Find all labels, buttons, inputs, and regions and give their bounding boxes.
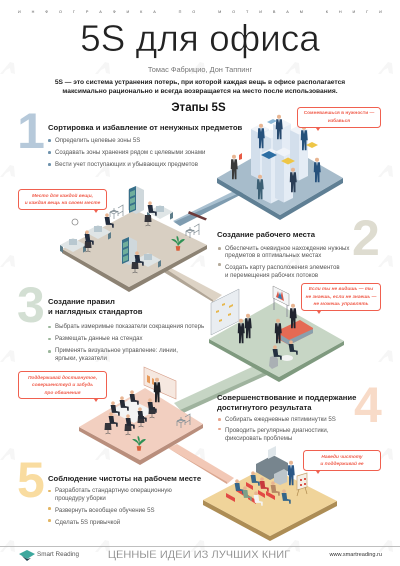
callout 5: и поддерживай ее (320, 462, 364, 467)
connector 4 to 5 (168, 444, 234, 484)
step 4 bullets: Проводить регулярные диагностики, (225, 427, 329, 434)
step 2 bullets: и перемещения рабочих потоков (225, 272, 318, 279)
intro text: максимально рационально и всегда возвращается на место после использования. (62, 88, 338, 95)
step 1 bullets: Вести учет поступающих и убывающих предметов (55, 160, 198, 168)
step 3 number: 3 (17, 277, 45, 333)
archive blocks (251, 120, 308, 204)
step 3 bullets: Выбрать измеримые показатели сокращения потерь (55, 323, 204, 330)
top strapline: А (99, 10, 102, 14)
callout 4 (18, 371, 107, 399)
top strapline: В (273, 10, 275, 14)
step 4 heading: достигнутого результата (217, 403, 312, 412)
step 3 bullets (48, 323, 204, 362)
authors: Томас Фабрицио, Дон Таппинг (148, 65, 252, 74)
connector 1 to 2 (173, 190, 246, 226)
footer rule (0, 546, 400, 548)
step 2 bullets: Обеспечить очевидное нахождение нужных (225, 244, 349, 252)
step 5 heading: Соблюдение чистоты на рабочем месте (48, 474, 201, 483)
platform 3: visual standards (209, 286, 344, 382)
step 5 bullets: Развернуть всеобщее обучение 5S (55, 507, 155, 514)
step 2 bullets: предметов в оптимальных местах (225, 252, 321, 259)
top strapline: П (179, 10, 181, 14)
top strapline: К (326, 10, 328, 14)
top strapline: М (300, 10, 303, 14)
callout 3 (301, 283, 381, 311)
callout 2: и каждая вещь на своем месте (25, 201, 100, 206)
connector 3 to 4 (174, 366, 268, 414)
step 5 number: 5 (17, 452, 45, 508)
top strapline: Г (366, 10, 368, 14)
step 1 bullets: Определить целевые зоны 5S (55, 136, 140, 144)
callout 2 (18, 189, 107, 210)
top strapline: Р (86, 10, 88, 14)
top strapline: К (140, 10, 142, 14)
callout 4: Поддерживай достигнутое, (28, 376, 97, 380)
step 2 number: 2 (352, 210, 380, 266)
step 4 bullets (218, 416, 336, 442)
top strapline: О (59, 10, 62, 14)
footer logo icon (19, 550, 35, 561)
step 1 bullets: Создавать зоны хранения рядом с целевыми зонами (55, 148, 205, 156)
footer slogan: ЦЕННЫЕ ИДЕИ ИЗ ЛУЧШИХ КНИГ (108, 549, 290, 561)
top strapline: Г (73, 10, 75, 14)
section heading: Этапы 5S (171, 102, 226, 114)
callout 4: про обвинения (44, 391, 81, 396)
step 4 number: 4 (354, 377, 382, 433)
top strapline: И (379, 10, 382, 14)
step 5 bullets: Разработать стандартную операционную (55, 487, 172, 494)
top strapline: Н (32, 10, 34, 14)
step 3 heading: Создание правил (48, 297, 115, 306)
step 1 number: 1 (17, 103, 45, 159)
intro text (55, 79, 345, 95)
top strapline: Н (339, 10, 342, 14)
top strapline: Т (246, 10, 248, 14)
top strapline: Ф (45, 10, 48, 14)
callout 2: Место для каждой вещи, (32, 194, 93, 198)
callout 1 (297, 107, 381, 128)
footer brand: Smart Reading (37, 551, 79, 558)
top strapline: И (127, 10, 129, 14)
step 4 heading: Совершенствование и поддержание (217, 393, 356, 402)
step 4 bullets: Собирать ежедневные пятиминутки 5S (225, 416, 336, 422)
callout 1: Сомневаешься в нужности — избавься (304, 111, 374, 124)
title: 5S для офиса (80, 18, 320, 59)
top strapline (18, 10, 382, 14)
step 2 bullets (218, 244, 350, 279)
step 5 bullets (48, 487, 172, 526)
platform 4: improvement (79, 367, 203, 465)
top strapline: И (18, 10, 21, 14)
top strapline: М (218, 10, 221, 14)
step 3 bullets: ярлыки, указатели (55, 355, 107, 362)
platform 1: sorting (217, 115, 343, 220)
top strapline: О (232, 10, 235, 14)
step 1 bullets (48, 136, 205, 168)
callout 5 (303, 450, 381, 471)
intro text: 5S — это система устранения потерь, при которой каждая вещь в офисе располагается (55, 79, 345, 86)
step 5 bullets: процедуру уборки (55, 495, 106, 502)
top strapline: О (192, 10, 195, 14)
step 3 heading: и наглядных стандартов (48, 307, 142, 316)
step 4 bullets: фиксировать проблемы (225, 435, 292, 442)
callout 3: Если ты не видишь — ты (309, 287, 373, 292)
callout 3: не можешь управлять (314, 302, 368, 307)
callout 4: совершенствуй и забудь (32, 383, 93, 388)
office workers with papers (231, 115, 321, 199)
step 2 heading: Создание рабочего места (217, 230, 315, 239)
step 2 bullets: Создать карту расположения элементов (225, 264, 340, 271)
step 5 bullets: Сделать 5S привычкой (55, 519, 120, 526)
top strapline: А (286, 10, 289, 14)
step 1 heading: Сортировка и избавление от ненужных предметов (48, 123, 242, 132)
step 3 bullets: Применять визуальное управление: линии, (55, 347, 178, 354)
callout 5: Наведи чистоту (321, 454, 363, 460)
top strapline: И (259, 10, 262, 14)
step 3 heading (48, 297, 142, 316)
step 4 heading (217, 393, 356, 412)
footer site: www.smartreading.ru (329, 552, 382, 558)
platform 5: cleanliness (203, 446, 337, 541)
platform 2: workplace (60, 186, 207, 292)
top strapline: А (153, 10, 156, 14)
top strapline: Ф (113, 10, 116, 14)
callout 3: не знаешь, если не знаешь — (306, 295, 376, 300)
top strapline: И (352, 10, 355, 14)
connector 2 to 3 (162, 267, 222, 302)
step 3 bullets: Размещать данные на стендах (55, 335, 143, 342)
